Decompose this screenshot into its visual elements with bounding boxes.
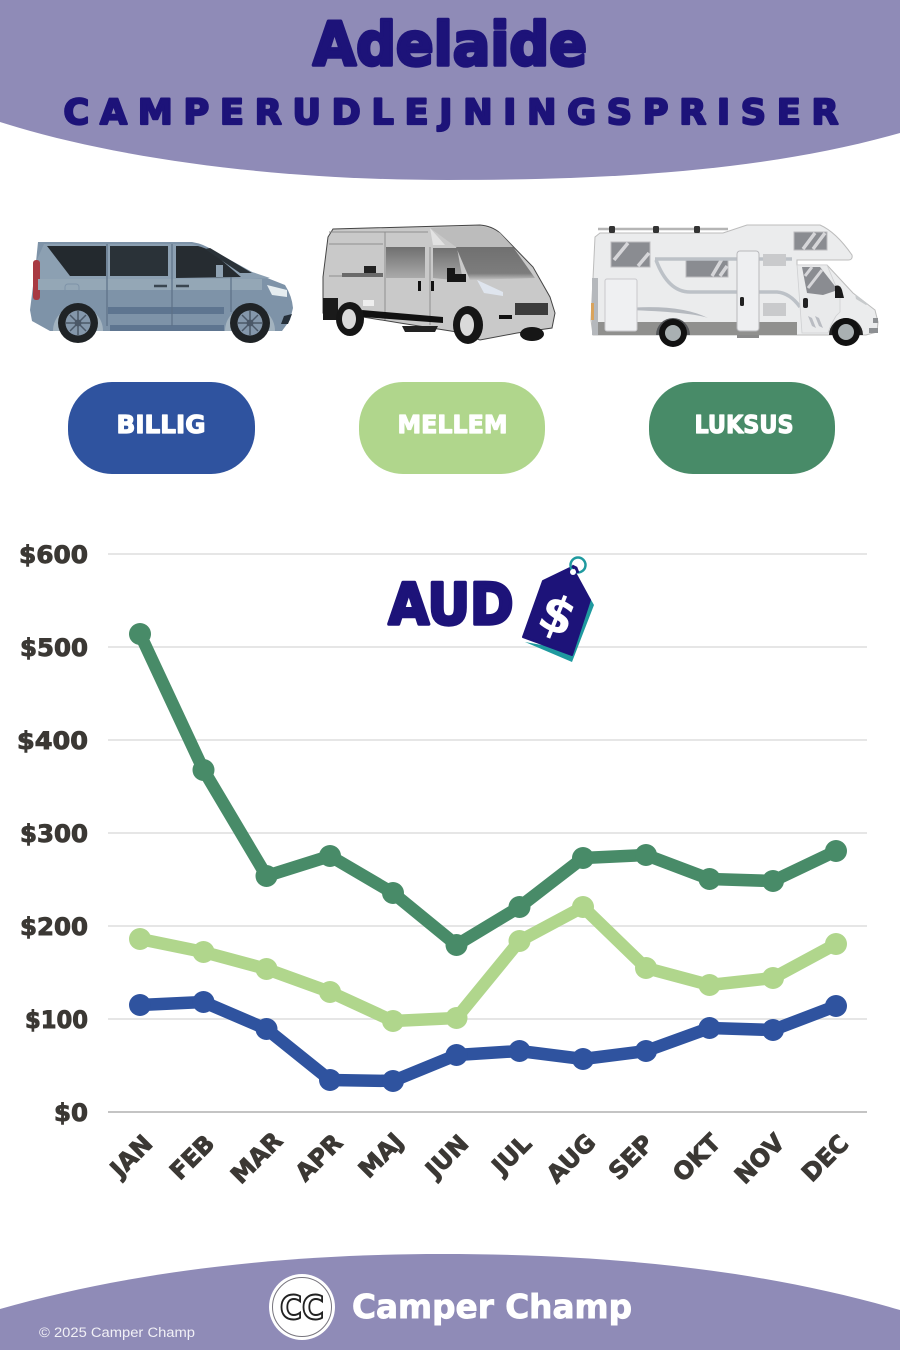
x axis labels: OKT — [667, 1128, 727, 1187]
icon: price tag — [523, 558, 594, 662]
footer background — [0, 1254, 900, 1350]
front wheel — [453, 306, 483, 344]
x axis labels: APR — [290, 1128, 348, 1187]
y axis labels: $400 — [17, 727, 88, 755]
brand name: Camper Champ — [352, 1287, 632, 1326]
button: luksus — [649, 382, 835, 474]
y axis labels: $200 — [20, 913, 88, 941]
rear wheel — [58, 303, 98, 343]
button: mellem: MELLEM — [398, 410, 508, 439]
button: billig — [68, 382, 255, 474]
x axis labels: NOV — [729, 1128, 791, 1190]
y axis labels: $100 — [25, 1006, 88, 1034]
x axis labels: DEC — [796, 1129, 854, 1187]
y axis labels — [17, 541, 88, 1127]
x axis labels: MAJ — [353, 1127, 409, 1184]
y axis labels: $500 — [20, 634, 88, 662]
copyright: © 2025 Camper Champ — [39, 1325, 195, 1340]
x axis labels: JUL — [485, 1129, 537, 1182]
series: billig — [129, 991, 847, 1092]
front wheel — [230, 303, 270, 343]
button: billig: BILLIG — [116, 410, 206, 439]
title: Adelaide — [313, 10, 587, 80]
subtitle: CAMPERUDLEJNINGSPRISER — [64, 93, 839, 133]
header background — [0, 0, 900, 180]
front wheel — [832, 318, 860, 346]
vehicle: mid-range van — [323, 225, 555, 344]
button: luksus: LUKSUS — [694, 410, 794, 439]
y axis labels: $300 — [20, 820, 88, 848]
vehicle: luxury motorhome — [591, 225, 878, 347]
vehicle: budget people carrier — [30, 242, 293, 343]
series: luksus — [129, 623, 847, 956]
x axis labels: JUN — [419, 1129, 474, 1185]
logo — [269, 1274, 335, 1340]
series: mellem — [129, 896, 847, 1032]
line chart — [17, 541, 867, 1190]
x axis labels — [103, 1126, 854, 1190]
x axis labels: MAR — [225, 1126, 288, 1189]
y axis labels: $600 — [19, 541, 88, 569]
x axis labels: FEB — [164, 1129, 220, 1185]
rear wheel — [659, 319, 687, 347]
x axis labels: SEP — [603, 1129, 659, 1186]
logo: CC — [280, 1288, 324, 1327]
button: mellem — [359, 382, 545, 474]
x axis labels: AUG — [541, 1128, 601, 1189]
rear wheel — [336, 302, 364, 336]
x axis labels: JAN — [103, 1129, 158, 1184]
currency label: AUD — [388, 572, 514, 638]
icon: price tag: $ — [530, 582, 584, 649]
y axis labels: $0 — [54, 1099, 88, 1127]
